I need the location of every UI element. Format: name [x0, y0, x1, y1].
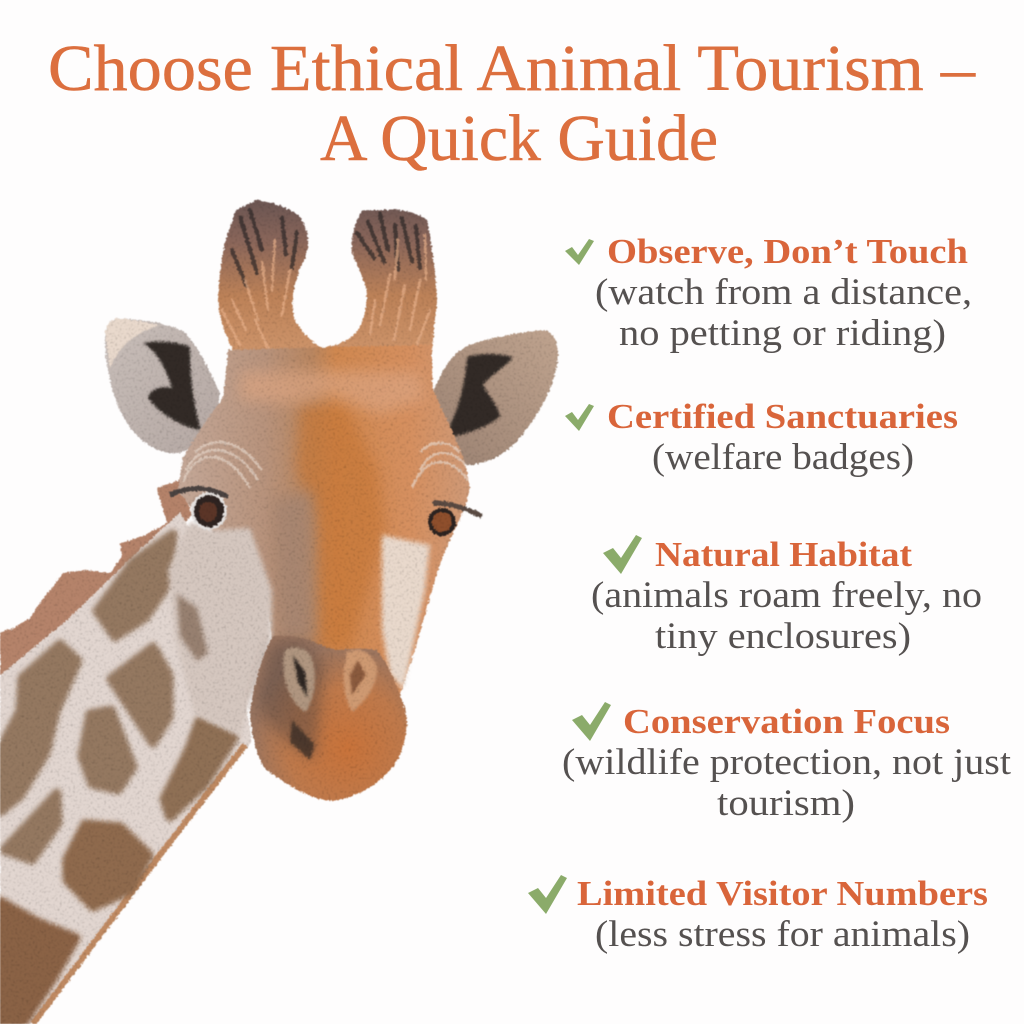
item: observe, don't touch — [565, 232, 972, 354]
right ossicone — [327, 210, 437, 380]
left nostril — [283, 648, 315, 712]
neck edge rust — [33, 745, 245, 1024]
item: limited visitor numbers: Limited Visitor Numbers — [577, 874, 988, 913]
neck mane — [0, 480, 192, 682]
right nostril — [344, 650, 377, 712]
neck spots — [0, 534, 234, 1024]
item: conservation focus: Conservation Focus — [623, 702, 950, 741]
pale cheek left — [168, 520, 272, 735]
item: observe, don't touch: Observe, Don’t Touch — [607, 232, 968, 271]
title: A Quick Guide — [320, 102, 718, 175]
ossicone fur — [222, 210, 430, 352]
item: natural habitat: Natural Habitat — [655, 535, 912, 574]
item: natural habitat — [591, 535, 982, 657]
item: certified sanctuaries — [565, 397, 958, 478]
jaw spot — [177, 594, 208, 661]
item: limited visitor numbers — [528, 874, 988, 955]
item: natural habitat: tiny enclosures) — [655, 616, 911, 657]
right ear — [433, 330, 558, 465]
item: certified sanctuaries: (welfare badges) — [652, 437, 914, 478]
title — [48, 32, 976, 175]
item: conservation focus: (wildlife protection, not just — [562, 742, 1012, 783]
left ossicone — [218, 200, 330, 380]
check icon — [603, 535, 642, 574]
taupe band beside nose — [272, 490, 315, 640]
title: Choose Ethical Animal Tourism – — [48, 32, 976, 105]
check icon — [572, 702, 611, 741]
check icon — [565, 239, 594, 265]
neck — [0, 512, 252, 1024]
head — [178, 345, 470, 695]
muzzle — [250, 635, 407, 801]
item: natural habitat: (animals roam freely, no — [591, 575, 982, 616]
dark mottling — [258, 640, 325, 760]
check icon — [565, 404, 594, 431]
item: observe, don't touch: (watch from a distance, — [595, 272, 972, 313]
upper forehead highlight — [240, 370, 425, 415]
check icon — [528, 875, 567, 914]
item: certified sanctuaries: Certified Sanctuaries — [607, 397, 958, 436]
item: conservation focus — [562, 702, 1012, 824]
left ear — [105, 318, 220, 453]
item: limited visitor numbers: (less stress for animals) — [595, 914, 970, 955]
forehead orange patch — [296, 405, 385, 650]
right eye — [428, 503, 482, 536]
giraffe illustration — [0, 200, 558, 1024]
item: conservation focus: tourism) — [717, 783, 855, 824]
left eye — [170, 488, 228, 530]
brow wrinkles left — [183, 442, 468, 488]
item: observe, don't touch: no petting or riding) — [619, 313, 946, 354]
pale cheek right — [382, 535, 430, 690]
